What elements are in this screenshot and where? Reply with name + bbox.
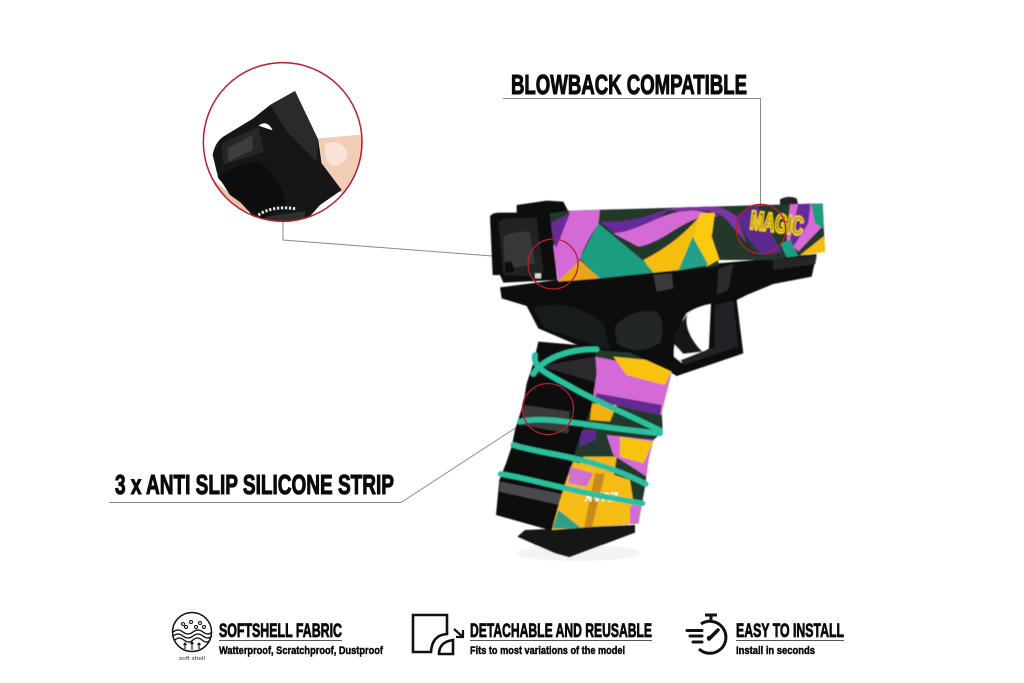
inset photo: detachable fabric close-up (203, 63, 367, 222)
magazine base (517, 525, 635, 557)
icon: stopwatch (687, 615, 726, 653)
description: Fits to most variations of the model (470, 645, 625, 657)
highlight circle: slide logo (736, 204, 786, 254)
heading: blowback compatible: BLOWBACK COMPATIBLE (511, 69, 747, 100)
leader line: inset detail (283, 220, 492, 256)
silicone band 2 (520, 420, 660, 433)
pistol with printed skin (490, 197, 830, 561)
heading: anti slip silicone strip: 3 x ANTI SLIP SILICONE STRIP (115, 469, 394, 500)
description: Watterproof, Scratchproof, Dustproof (219, 645, 383, 657)
silicone band 4 (501, 474, 642, 503)
icon caption: soft shell (179, 656, 205, 662)
pistol grip with silicone bands (496, 342, 677, 557)
feature: softshell fabric (172, 612, 383, 662)
description: Install in seconds (736, 645, 815, 657)
leader line: blowback compatible (503, 98, 760, 206)
leader line: silicone strip (109, 425, 520, 502)
grip sleeve (496, 342, 672, 531)
feature: detachable and reusable (413, 615, 652, 657)
icon: soft shell (172, 612, 212, 652)
logo on slide: MAGIC (749, 205, 805, 241)
silicone band 1b (535, 355, 660, 431)
title: SOFTSHELL FABRIC (219, 621, 342, 642)
printed slide art (547, 200, 830, 287)
highlight circle: rear cut-out (528, 239, 578, 289)
icon: detachable corner (413, 615, 463, 654)
title: EASY TO INSTALL (736, 621, 844, 642)
pistol upper: slide and frame (490, 197, 830, 376)
highlight circle: grip strip (522, 384, 574, 434)
title: DETACHABLE AND REUSABLE (470, 621, 652, 642)
brand print: ZUAK (582, 490, 618, 504)
silicone band 1a (533, 349, 597, 374)
silicone band 3 (513, 445, 646, 484)
ground shadow (516, 545, 640, 561)
feature: easy to install (687, 615, 844, 657)
